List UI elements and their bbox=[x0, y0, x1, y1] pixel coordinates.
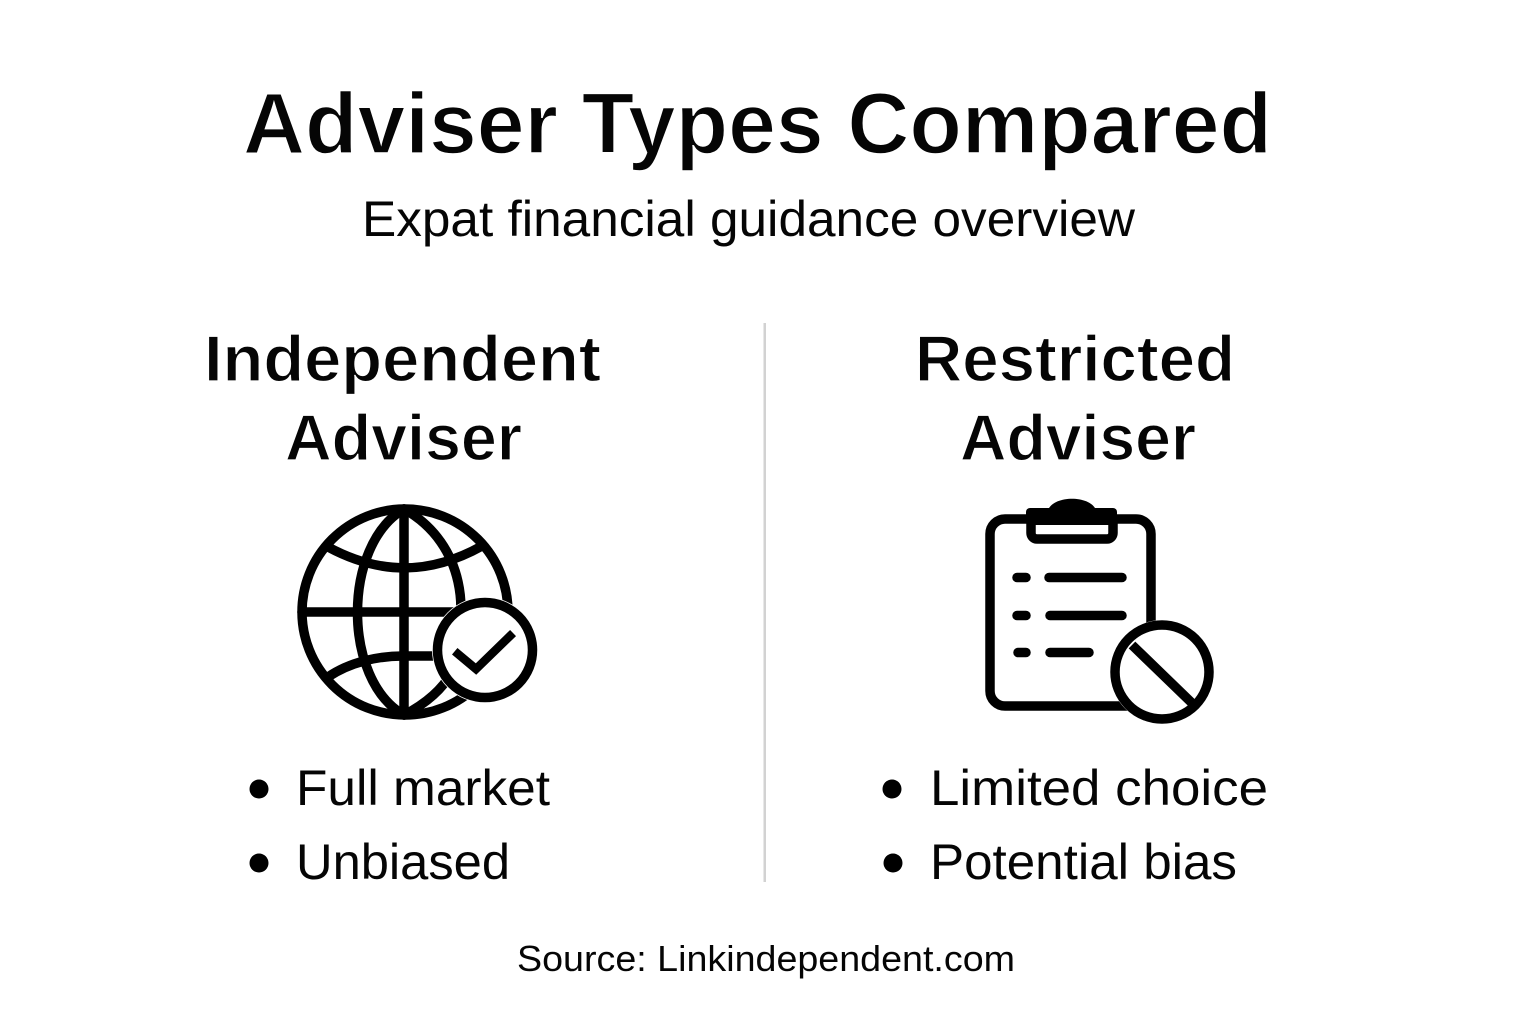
heading: independent adviser: Independent bbox=[204, 322, 601, 395]
heading: independent adviser bbox=[204, 322, 601, 474]
bullet list: independent: Full market bbox=[296, 760, 550, 816]
icon: clipboard with prohibition badge bbox=[990, 499, 1214, 724]
heading: restricted adviser: Adviser bbox=[960, 401, 1196, 474]
bullet list: restricted: Limited choice bbox=[930, 760, 1268, 816]
center divider bbox=[764, 323, 766, 882]
icon: globe with check badge bbox=[302, 509, 538, 715]
panel: restricted adviser bbox=[882, 322, 1268, 890]
heading: restricted adviser bbox=[915, 322, 1235, 474]
subtitle: Expat financial guidance overview bbox=[362, 191, 1136, 247]
bullet list: restricted bbox=[882, 760, 1268, 890]
heading: restricted adviser: Restricted bbox=[915, 322, 1235, 395]
source note: Source: Linkindependent.com bbox=[517, 938, 1015, 979]
panel: independent adviser bbox=[204, 322, 601, 890]
bullet list: independent bbox=[250, 760, 550, 890]
bullet list: restricted: Potential bias bbox=[930, 834, 1237, 890]
heading: independent adviser: Adviser bbox=[285, 401, 522, 474]
title: Adviser Types Compared bbox=[243, 76, 1272, 172]
bullet list: independent: Unbiased bbox=[296, 834, 510, 890]
